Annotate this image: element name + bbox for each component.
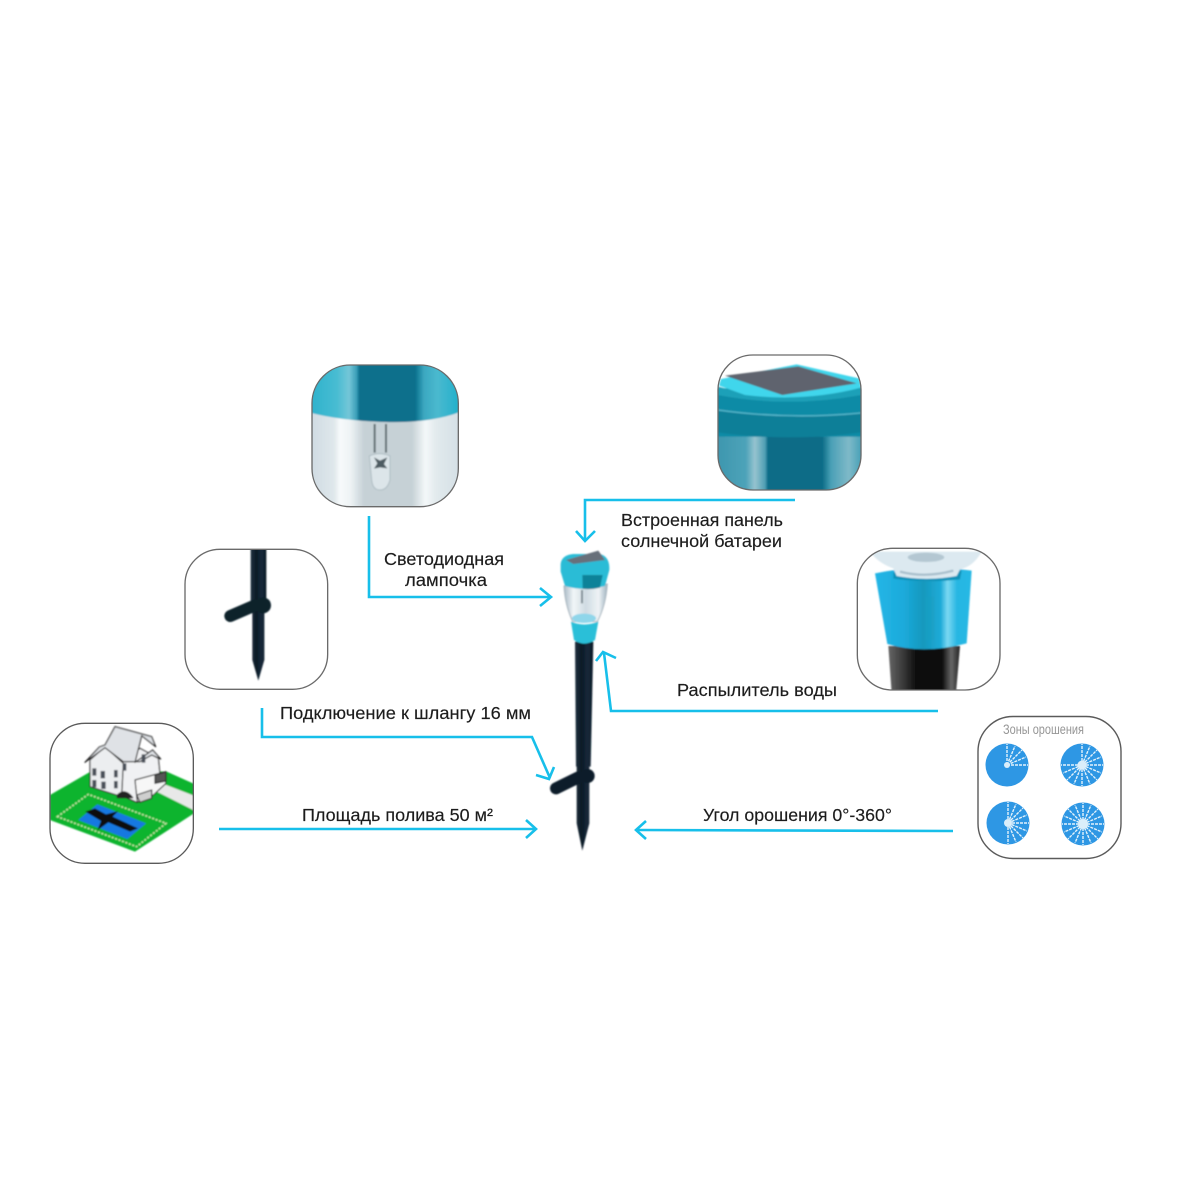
label: water sprayer: Распылитель воды <box>677 680 837 700</box>
label: solar panel: солнечной батареи <box>621 531 782 551</box>
zone: 360 degree <box>1062 802 1104 846</box>
connector: spray angle <box>636 821 953 839</box>
label: watering area: Площадь полива 50 м² <box>302 805 493 825</box>
lawn <box>50 770 197 852</box>
panel: water sprayer photo <box>857 548 1000 693</box>
zone: 180 degree <box>986 802 1030 844</box>
label: solar panel: Встроенная панель <box>621 510 783 530</box>
product: solar sprinkler stake <box>556 551 609 851</box>
label: LED bulb <box>384 549 504 590</box>
label: LED bulb: Светодиодная <box>384 549 504 569</box>
panel: watering area illustration <box>50 723 197 863</box>
panel: irrigation zones <box>978 716 1121 858</box>
zones caption: Зоны орошения <box>1003 721 1084 737</box>
panel: solar panel photo <box>717 355 863 492</box>
connector: hose connection <box>262 708 554 779</box>
label: LED bulb: лампочка <box>405 570 487 590</box>
house <box>85 727 166 802</box>
label: hose connection: Подключение к шлангу 16 мм <box>280 703 531 723</box>
label: solar panel <box>621 510 783 551</box>
zone: 270 degree <box>1060 744 1104 786</box>
panel: LED bulb photo <box>310 363 460 510</box>
connector: solar panel <box>576 500 795 541</box>
label: spray angle: Угол орошения 0°-360° <box>703 805 892 825</box>
connector: watering area <box>219 820 536 838</box>
connector: LED bulb <box>369 516 551 606</box>
panel: hose connection photo <box>185 548 328 689</box>
connector: water sprayer <box>596 652 938 711</box>
zone: 90 degree <box>986 744 1028 786</box>
